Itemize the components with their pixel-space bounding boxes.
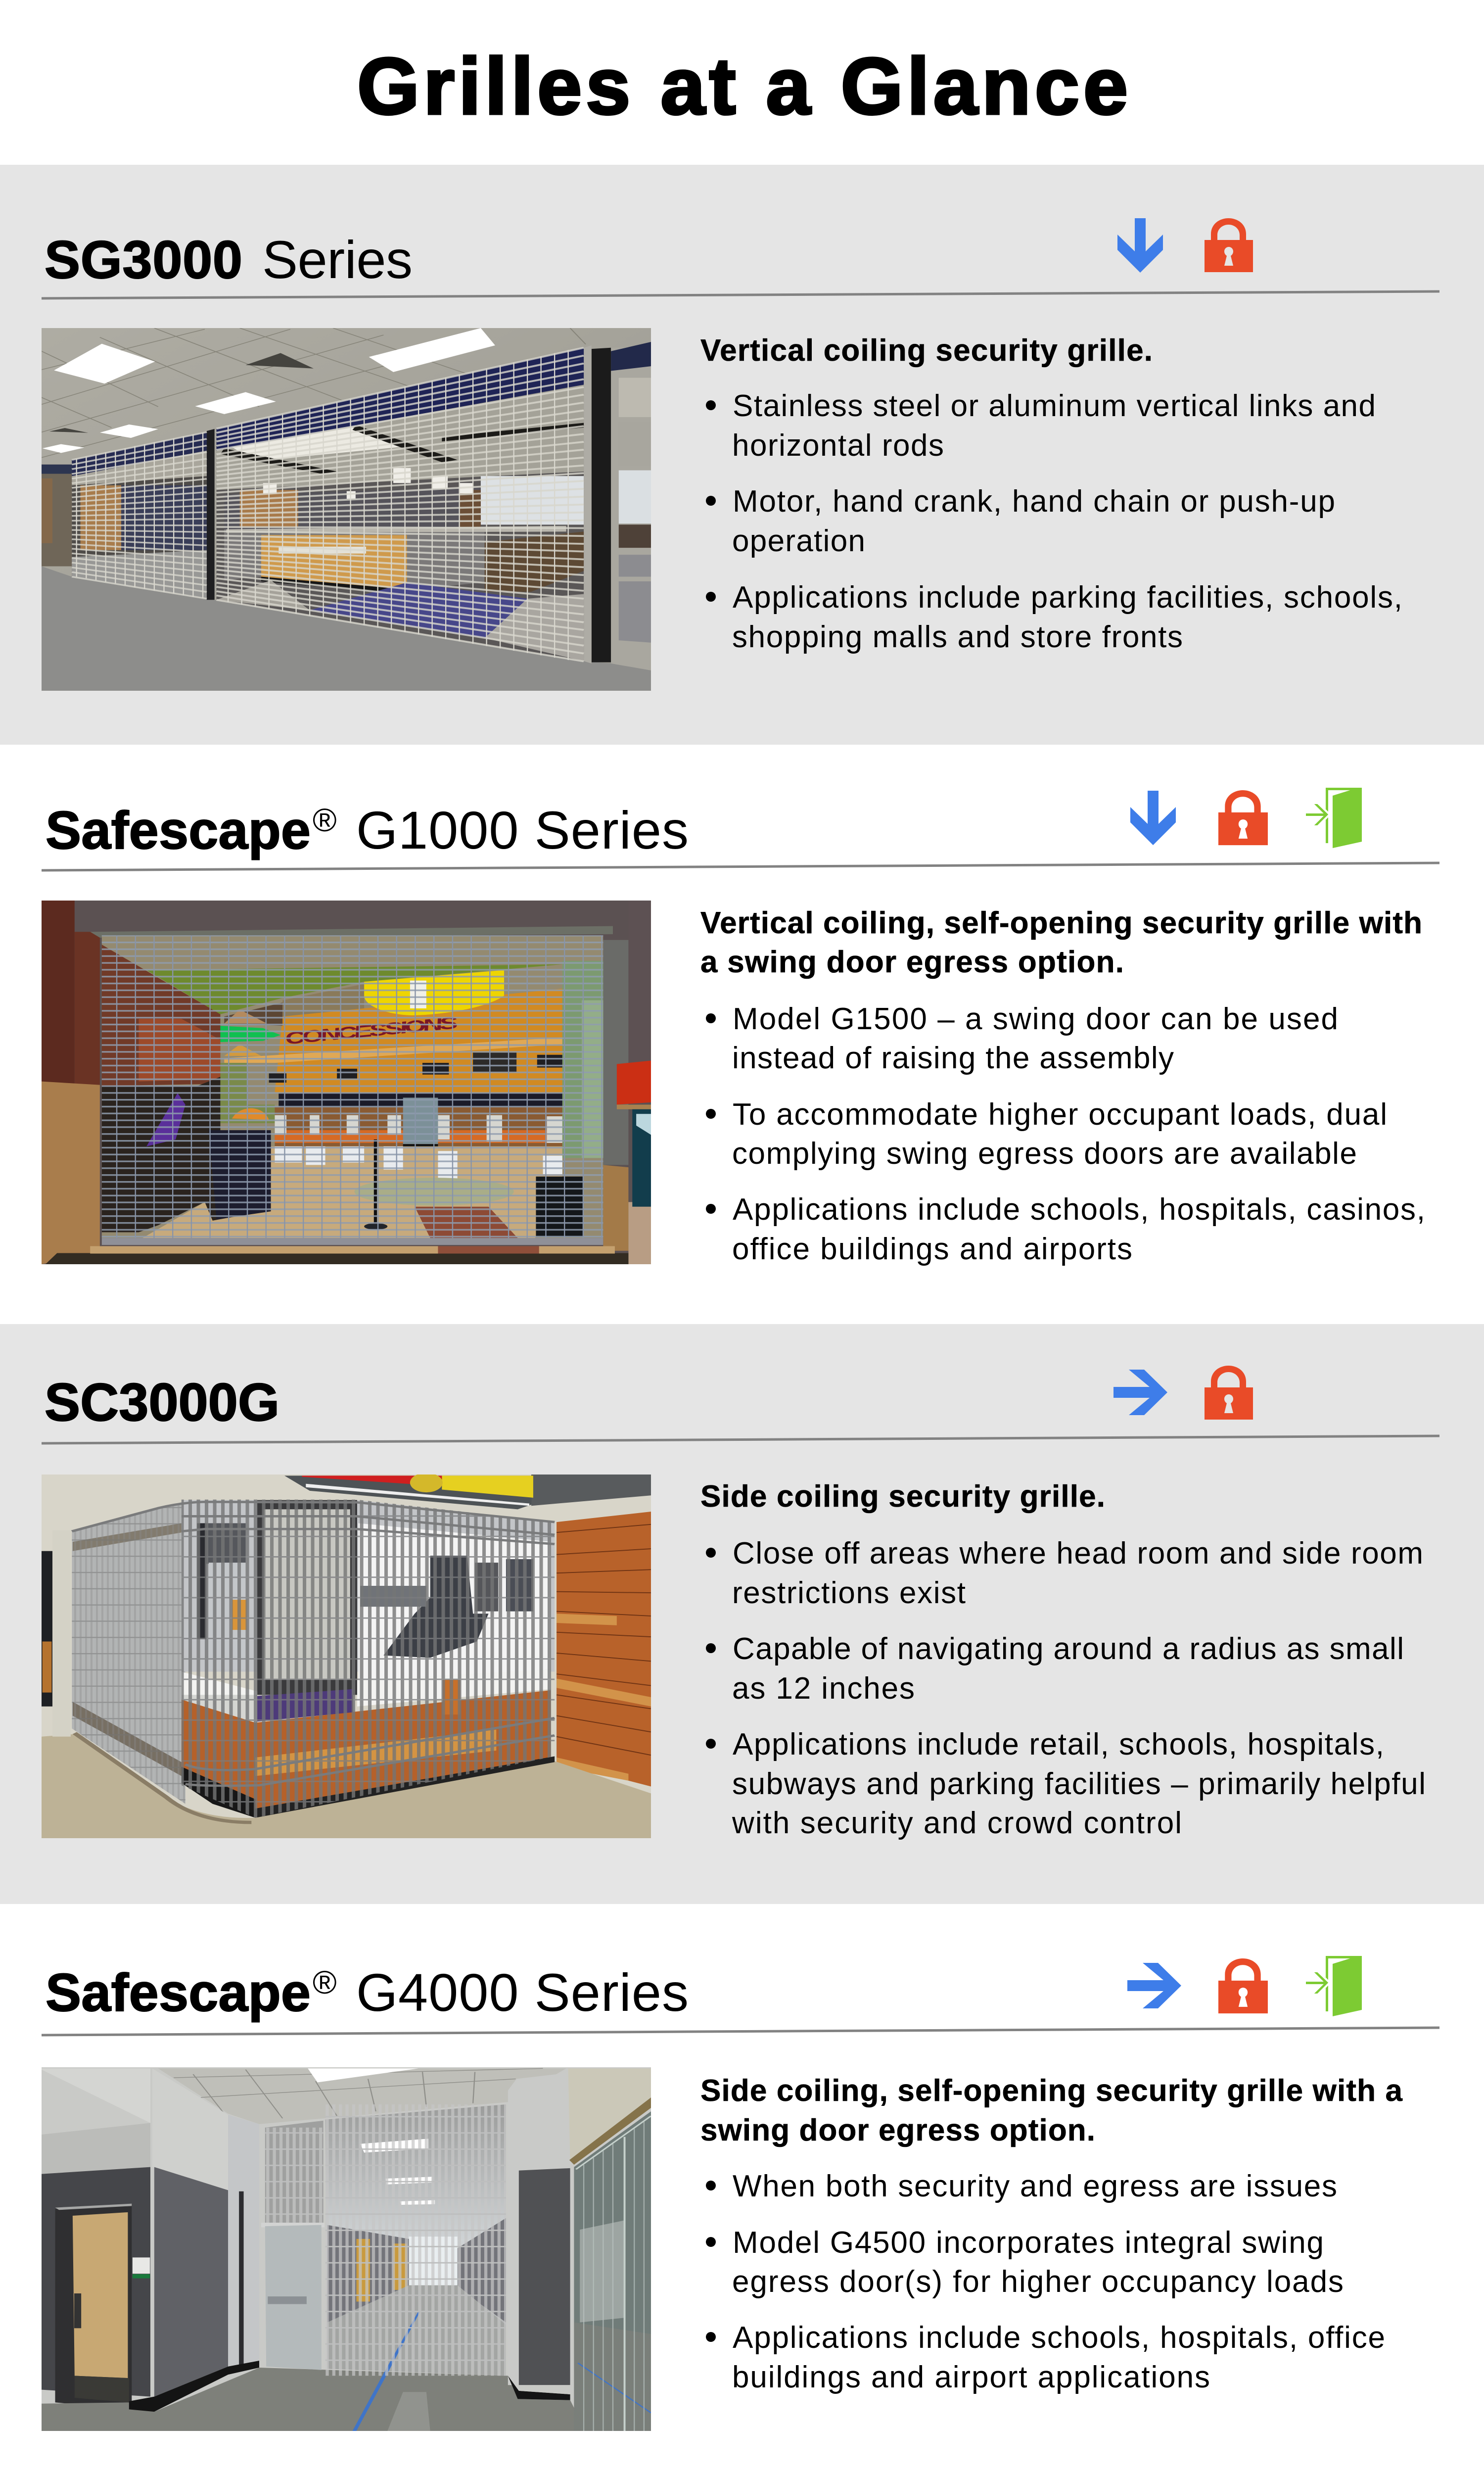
icon: lock xyxy=(1205,1366,1253,1420)
bullet 2 xyxy=(706,484,1335,558)
icon: lock xyxy=(1218,790,1268,845)
bullet 3: office buildings and airports xyxy=(732,1232,1132,1266)
heading: Safescape G1000 Series: ® xyxy=(313,802,337,838)
icon: lock xyxy=(1218,1958,1268,2013)
bullet 3 xyxy=(706,2321,1385,2394)
heading: Safescape G1000 Series: Safescape xyxy=(46,800,311,860)
text: G1000 description xyxy=(700,906,1425,1266)
panel: SC3000G xyxy=(0,1324,1484,1904)
bullet 2: Motor, hand crank, hand chain or push-up xyxy=(733,484,1335,519)
icon: lock xyxy=(1205,218,1253,272)
bullet 1: horizontal rods xyxy=(732,428,944,463)
heading: SG3000 Series: SG3000 xyxy=(45,230,242,289)
bullet 3: buildings and airport applications xyxy=(732,2360,1210,2394)
heading: SG3000 Series xyxy=(45,230,413,289)
icon: egress door xyxy=(1305,1956,1362,2016)
bullet 2: Capable of navigating around a radius as small xyxy=(733,1632,1404,1666)
text: G4000 description: swing door egress option. xyxy=(700,2113,1095,2147)
bullet 3 xyxy=(706,1192,1425,1266)
bullet 1: Close off areas where head room and side room xyxy=(733,1536,1423,1570)
shutter interior: right bay xyxy=(217,348,584,661)
icon: right arrow xyxy=(1127,1963,1181,2008)
bullet 3 xyxy=(706,580,1402,654)
bullet 3: Applications include schools, hospitals, office xyxy=(733,2321,1385,2355)
concessions interior xyxy=(102,935,603,1238)
bullet 1: restrictions exist xyxy=(732,1576,966,1610)
heading: Safescape G4000 Series xyxy=(46,1962,689,2022)
title: Grilles at a Glance xyxy=(357,42,1128,131)
bullet 2 xyxy=(706,2226,1344,2299)
bullet 3: Applications include parking facilities, schools, xyxy=(733,580,1402,615)
bullet 2: complying swing egress doors are available xyxy=(732,1137,1357,1171)
photo: G1000 grille at cinema concessions xyxy=(42,901,651,1264)
text: SG3000 description: Vertical coiling security grille. xyxy=(700,333,1153,368)
grille slats xyxy=(72,348,584,662)
bullet 2: operation xyxy=(732,524,865,558)
panel: Safescape G4000 Series xyxy=(42,1956,1439,2431)
text: G1000 description: Vertical coiling, self-opening security grille with xyxy=(700,906,1422,940)
bullet 2: To accommodate higher occupant loads, dual xyxy=(733,1097,1387,1132)
bullet 1: When both security and egress are issues xyxy=(733,2169,1337,2203)
heading: Safescape G1000 Series xyxy=(46,800,689,860)
concessions interior: CONCESSIONS xyxy=(282,1013,460,1048)
bullet 3: Applications include retail, schools, hospitals, xyxy=(733,1727,1384,1761)
bullet 3: Applications include schools, hospitals, casinos, xyxy=(733,1192,1425,1227)
bullet 3: shopping malls and store fronts xyxy=(732,620,1183,654)
photo: G4000 grille across hallway xyxy=(42,2067,651,2431)
grille slats xyxy=(102,935,603,1238)
bullet 2 xyxy=(706,1097,1387,1171)
bullet 1: Stainless steel or aluminum vertical links and xyxy=(733,389,1376,423)
icon: right arrow xyxy=(1113,1370,1167,1415)
shutter interior: left bay xyxy=(72,432,207,599)
bullet 3 xyxy=(706,1727,1426,1840)
center grille bay xyxy=(72,1500,555,1818)
text: G4000 description xyxy=(700,2074,1403,2394)
icon: down arrow xyxy=(1130,791,1176,845)
bullet 2: as 12 inches xyxy=(732,1671,915,1706)
bullet 1 xyxy=(706,389,1376,463)
corridor interior xyxy=(261,2104,506,2431)
heading: SG3000 Series: Series xyxy=(262,230,413,289)
bullet 3: subways and parking facilities – primarily helpful xyxy=(732,1767,1426,1801)
heading: Safescape G4000 Series: ® xyxy=(313,1964,337,2000)
left grille bay xyxy=(72,1501,186,1804)
bullet 1 xyxy=(706,1002,1338,1075)
panel: Safescape G1000 Series xyxy=(42,788,1439,1266)
bullet 2 xyxy=(706,1632,1404,1706)
bullet 1: Model G1500 – a swing door can be used xyxy=(733,1002,1338,1036)
text: SC3000G description xyxy=(700,1479,1426,1840)
bullet 1 xyxy=(706,1536,1423,1610)
panel: SG3000 Series xyxy=(0,165,1484,745)
heading: Safescape G4000 Series: Safescape xyxy=(46,1962,311,2022)
icon: egress door xyxy=(1305,788,1362,848)
photo: SG3000 grille in cafeteria xyxy=(42,328,651,691)
bullet 2: egress door(s) for higher occupancy loads xyxy=(732,2265,1344,2299)
text: G4000 description: Side coiling, self-opening security grille with a xyxy=(700,2074,1403,2108)
text: G1000 description: a swing door egress option. xyxy=(700,945,1124,979)
text: SG3000 description xyxy=(700,333,1402,654)
text: SC3000G description: Side coiling security grille. xyxy=(700,1479,1105,1514)
heading: SC3000G: SC3000G xyxy=(45,1372,279,1432)
photo: SC3000G grille at burger counter xyxy=(42,1475,651,1838)
icon: down arrow xyxy=(1117,218,1163,273)
bullet 1: instead of raising the assembly xyxy=(732,1041,1174,1075)
heading: Safescape G1000 Series: G1000 Series xyxy=(356,800,689,860)
bullet 2: Model G4500 incorporates integral swing xyxy=(733,2226,1324,2260)
heading: Safescape G4000 Series: G4000 Series xyxy=(356,1962,689,2022)
bullet 3: with security and crowd control xyxy=(732,1806,1182,1840)
